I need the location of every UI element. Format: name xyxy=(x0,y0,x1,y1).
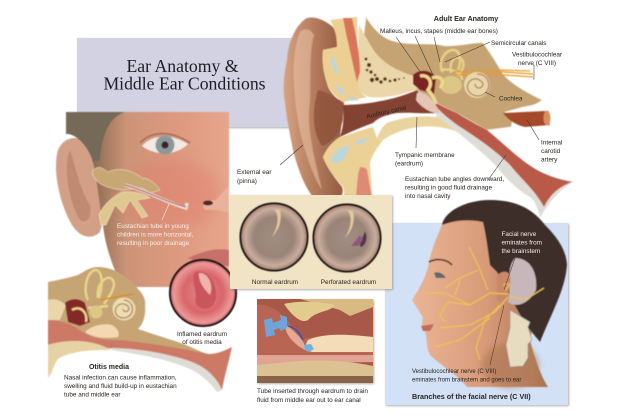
spongy bone lower xyxy=(323,127,383,207)
arrow xyxy=(288,326,303,340)
label: facial nerve origin: the brainstem xyxy=(502,248,540,255)
internal carotid artery xyxy=(503,110,550,127)
child ear xyxy=(56,138,112,237)
otitis middle ear cavity xyxy=(65,299,90,326)
perforated eardrum xyxy=(314,204,380,272)
label: vestibulocochlear: eminates from brainstem and goes to ear xyxy=(412,378,521,384)
external ear pinna xyxy=(284,17,344,207)
otitis salmon tissue xyxy=(48,320,232,390)
panel: child face xyxy=(56,112,229,287)
label: internal carotid artery: artery xyxy=(541,156,558,164)
label: auditory canal: Auditory canal xyxy=(366,105,407,120)
caption: tube insertion: fluid from middle ear out to ear canal xyxy=(257,397,361,404)
label: internal carotid artery: Internal xyxy=(541,140,562,146)
otitis cochlea xyxy=(112,298,136,320)
label: eustachian tube adult: into nasal cavity xyxy=(405,193,451,200)
ear xyxy=(497,272,510,302)
cochlea xyxy=(464,72,490,98)
panel: otitis media illustration xyxy=(48,267,232,392)
facial nerve branches xyxy=(425,247,544,360)
text: otitis description: tube and middle ear xyxy=(64,392,121,398)
neck and face skin xyxy=(412,211,548,387)
label: vestibulocochlear nerve: nerve (C VIII) xyxy=(518,60,556,67)
title: Ear Anatomy & xyxy=(126,56,238,76)
label: external ear: (pinna) xyxy=(237,178,257,185)
label: facial nerve origin: Facial nerve xyxy=(502,231,536,238)
cervical spine xyxy=(506,310,532,367)
lips xyxy=(188,249,229,266)
petrous temporal bone xyxy=(358,17,542,130)
otitis bone xyxy=(48,267,208,356)
ossicles xyxy=(420,76,442,104)
inflamed eardrum xyxy=(170,260,236,326)
label: tympanic membrane: (eardrum) xyxy=(395,160,423,168)
label: vestibulocochlear nerve: Vestibulocochlear xyxy=(512,52,562,58)
otitis ossicles and canals xyxy=(72,270,114,322)
small ear section xyxy=(92,167,187,225)
semicircular canals xyxy=(440,50,463,80)
otitis pale fluid bulge xyxy=(85,324,119,338)
label: eustachian tube adult: Eustachian tube angles downward, xyxy=(405,176,504,183)
label: normal eardrum: Normal eardrum xyxy=(252,279,298,286)
inner ear yellow vestibule xyxy=(440,76,462,94)
spongy bone upper xyxy=(323,17,367,102)
text: otitis description: swelling and fluid build-up in eustachian xyxy=(64,383,177,390)
icon: inserted tube xyxy=(304,344,314,352)
heading: adult ear anatomy: Adult Ear Anatomy xyxy=(434,14,498,23)
pale bone with speckles xyxy=(357,25,418,98)
label: inflamed eardrum: of otitis media xyxy=(182,339,222,346)
child face skin xyxy=(92,112,229,287)
otitis left bone band xyxy=(48,299,66,320)
label: cochlea: Cochlea xyxy=(499,96,523,102)
label: child eustachian tube: resulting in poor drainage xyxy=(117,240,190,247)
middle ear cavity xyxy=(413,71,436,94)
otitis nerve xyxy=(100,294,133,300)
head illustration xyxy=(412,200,567,387)
otitis tube wall xyxy=(112,348,222,392)
panel: tube insertion xyxy=(257,299,373,383)
label: child eustachian tube: children is more horizontal, xyxy=(117,232,194,238)
label: tympanic membrane: Tympanic membrane xyxy=(395,152,455,159)
label: perforated eardrum: Perforated eardrum xyxy=(321,279,376,286)
text: otitis description: Nasal infection can cause inflammation, xyxy=(64,374,177,382)
panel: facial nerve xyxy=(385,200,568,405)
panel: eardrum comparison xyxy=(230,195,392,289)
leader: child tube xyxy=(162,204,169,220)
title: Middle Ear Conditions xyxy=(103,74,266,94)
vestibulocochlear nerve xyxy=(453,70,533,77)
mastoid speckles xyxy=(364,58,405,84)
label: internal carotid artery: carotid xyxy=(541,148,561,155)
heading: branches of facial nerve: Branches of the facial nerve (C VII) xyxy=(412,392,531,401)
label lines: adult ear xyxy=(280,36,539,180)
leaders: facial panel xyxy=(490,258,515,365)
nose xyxy=(203,186,229,212)
child hair xyxy=(66,112,125,162)
label: ossicles: Malleus, incus, stapes (middle ear bones) xyxy=(380,28,498,35)
panel: adult ear anatomy illustration xyxy=(284,17,574,218)
otitis vestibule xyxy=(90,306,102,318)
normal eardrum xyxy=(240,204,308,270)
tympanic membrane xyxy=(416,92,440,113)
eyebrow and eye xyxy=(429,260,452,265)
lips xyxy=(421,324,434,331)
eustachian tube xyxy=(430,100,574,218)
eye xyxy=(140,134,190,154)
otitis lower bone xyxy=(48,341,112,378)
label: semicircular canals: Semicircular canals xyxy=(491,40,546,47)
label: eustachian tube adult: resulting in good fluid drainage xyxy=(405,184,492,192)
title panel xyxy=(77,38,302,127)
caption: tube insertion: Tube inserted through eardrum to drain xyxy=(257,388,368,395)
label: child eustachian tube: Eustachian tube in young xyxy=(117,223,189,230)
hair xyxy=(442,200,567,342)
icon: tube xyxy=(264,315,287,337)
auditory canal xyxy=(340,90,437,137)
lower tympanic bone xyxy=(377,116,466,140)
label: facial nerve origin: eminates from xyxy=(502,240,542,246)
label: inflamed eardrum: Inflamed eardrum xyxy=(177,331,227,338)
label: external ear: External ear xyxy=(237,169,271,176)
label: vestibulocochlear: Vestibulocochlear nerve (C VIII) xyxy=(412,369,496,375)
brainstem cut-away xyxy=(508,258,536,305)
heading: otitis media: Otitis media xyxy=(89,364,129,371)
